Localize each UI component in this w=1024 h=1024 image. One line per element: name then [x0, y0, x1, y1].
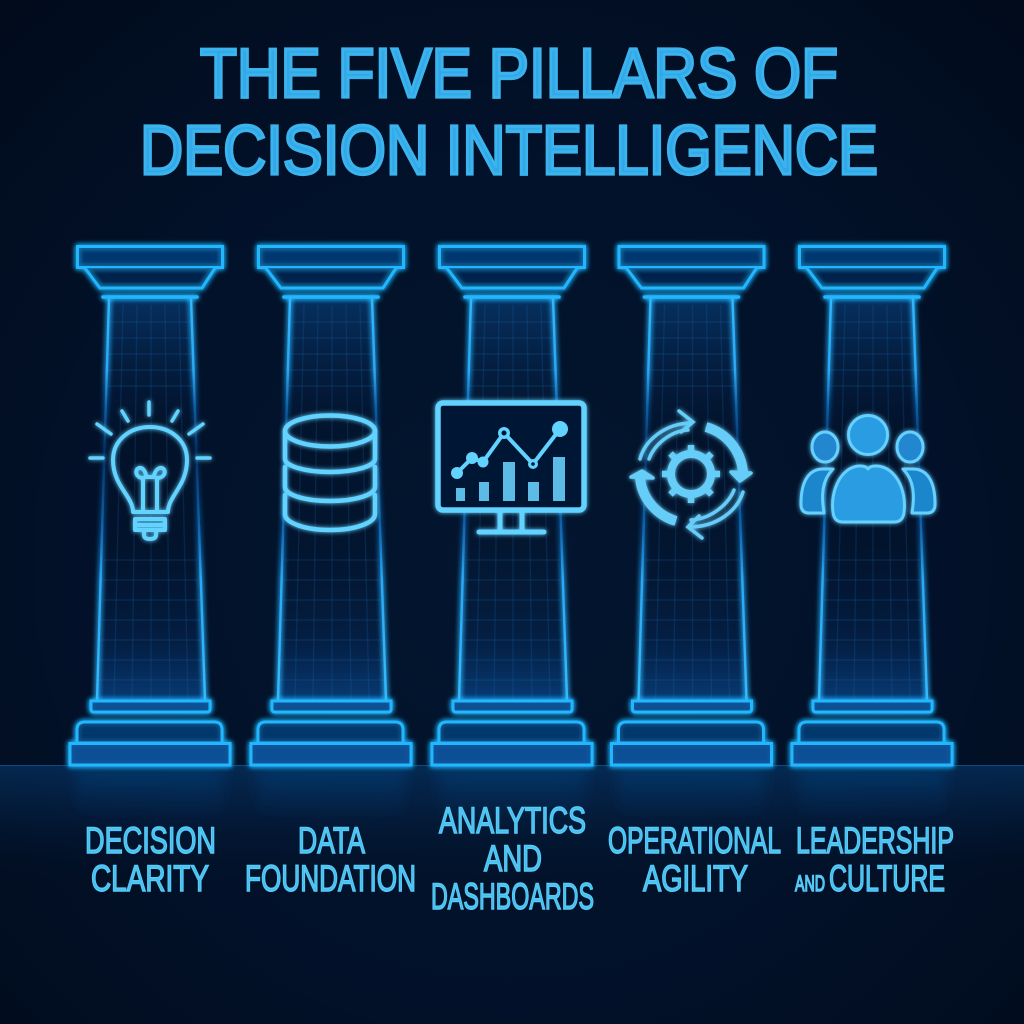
label: data foundation: DATA: [298, 820, 365, 861]
pillar 4: operational agility: [612, 246, 772, 821]
icon: database: [285, 416, 375, 530]
label: leadership and culture: CULTURE: [829, 858, 945, 899]
pillar 2: data foundation: [251, 246, 411, 821]
icon: agility cycle with gear: [631, 411, 751, 538]
label: analytics and dashboards: [431, 800, 594, 917]
title: THE FIVE PILLARS OF: [200, 34, 838, 112]
label: decision clarity: [85, 820, 216, 899]
title: DECISION INTELLIGENCE: [140, 111, 878, 189]
label: decision clarity: DECISION: [85, 820, 216, 861]
icon: dashboard monitor: [438, 403, 584, 532]
label: analytics and dashboards: ANALYTICS: [439, 800, 586, 841]
icon: light bulb: [90, 402, 210, 539]
pillar 5: leadership and culture: [792, 246, 952, 821]
label: data foundation: [245, 820, 416, 899]
floor glow: [0, 765, 1024, 880]
label: operational agility: [608, 820, 781, 899]
label: leadership and culture: [795, 820, 954, 899]
label: leadership and culture: LEADERSHIP: [796, 820, 954, 861]
label: analytics and dashboards: AND: [484, 838, 542, 879]
label: data foundation: FOUNDATION: [245, 858, 416, 899]
pillar 3: analytics and dashboards: [432, 246, 592, 821]
icon: people: [801, 416, 935, 522]
title: [140, 34, 878, 189]
label: analytics and dashboards: DASHBOARDS: [431, 876, 594, 917]
label: operational agility: AGILITY: [643, 858, 748, 899]
label: leadership and culture: AND: [795, 871, 825, 896]
label: decision clarity: CLARITY: [91, 858, 209, 899]
label: operational agility: OPERATIONAL: [608, 820, 781, 861]
pillar 1: decision clarity: [70, 246, 230, 821]
